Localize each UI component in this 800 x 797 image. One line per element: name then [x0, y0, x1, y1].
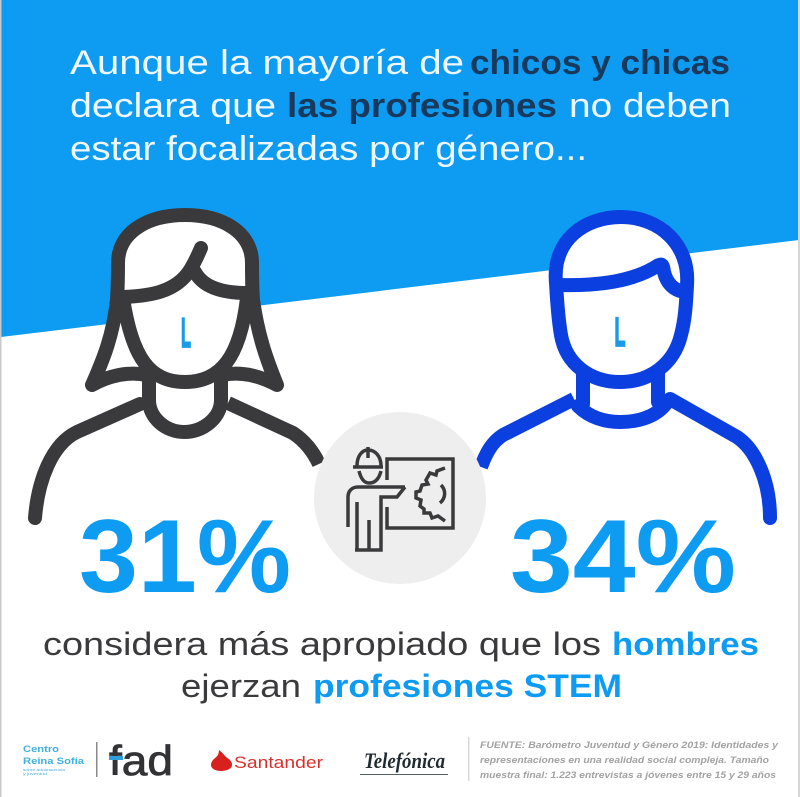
conclusion text: hombres — [612, 626, 759, 662]
logo: fad: fad — [109, 737, 173, 784]
title: chicos y chicas — [470, 44, 730, 82]
title — [70, 44, 731, 168]
infographic canvas: L — [614, 309, 626, 355]
logo: Santander — [211, 750, 323, 772]
logo: Centro Reina Sofía — [23, 744, 85, 776]
statistic: men 34%: 34% — [510, 499, 736, 615]
icon: engineer with gear board — [348, 447, 453, 550]
source note: FUENTE: Barómetro Juventud y Género 2019: Identidades y — [480, 740, 779, 751]
logo: Telefónica: Telefónica — [364, 748, 445, 773]
conclusion text: ejerzan — [181, 668, 301, 704]
title: no deben — [569, 87, 731, 125]
center circle with engineer icon — [314, 412, 486, 584]
title: las profesiones — [287, 87, 557, 125]
title: declara que — [70, 87, 276, 125]
logo: Centro Reina Sofía: Reina Sofía — [23, 756, 85, 766]
conclusion text: considera más apropiado que los — [43, 626, 601, 662]
statistic: women 31%: 31% — [79, 499, 291, 615]
title: Aunque la mayoría de — [70, 44, 464, 82]
source note — [480, 740, 779, 781]
source divider — [468, 737, 470, 781]
source note: representaciones en una realidad social compleja. Tamaño — [480, 755, 769, 766]
conclusion text — [43, 626, 759, 704]
logo: Centro Reina Sofía: Centro — [23, 744, 60, 754]
infographic canvas: L — [181, 309, 191, 356]
left edge strip — [0, 0, 2, 797]
icon: woman — [35, 215, 319, 518]
source note: muestra final: 1.223 entrevistas a jóvenes entre 15 y 29 años — [480, 770, 776, 781]
logo divider — [96, 742, 98, 777]
title: estar focalizadas por género... — [70, 130, 587, 168]
conclusion text: profesiones STEM — [313, 668, 622, 704]
right edge strip — [798, 0, 800, 797]
logo: Centro Reina Sofía: y juventud — [23, 771, 47, 776]
logo: Santander: Santander — [234, 753, 323, 772]
logo: Centro Reina Sofía: sobre adolescencia — [23, 767, 66, 772]
blue diagonal background panel — [1, 0, 799, 337]
icon: man — [481, 217, 770, 518]
